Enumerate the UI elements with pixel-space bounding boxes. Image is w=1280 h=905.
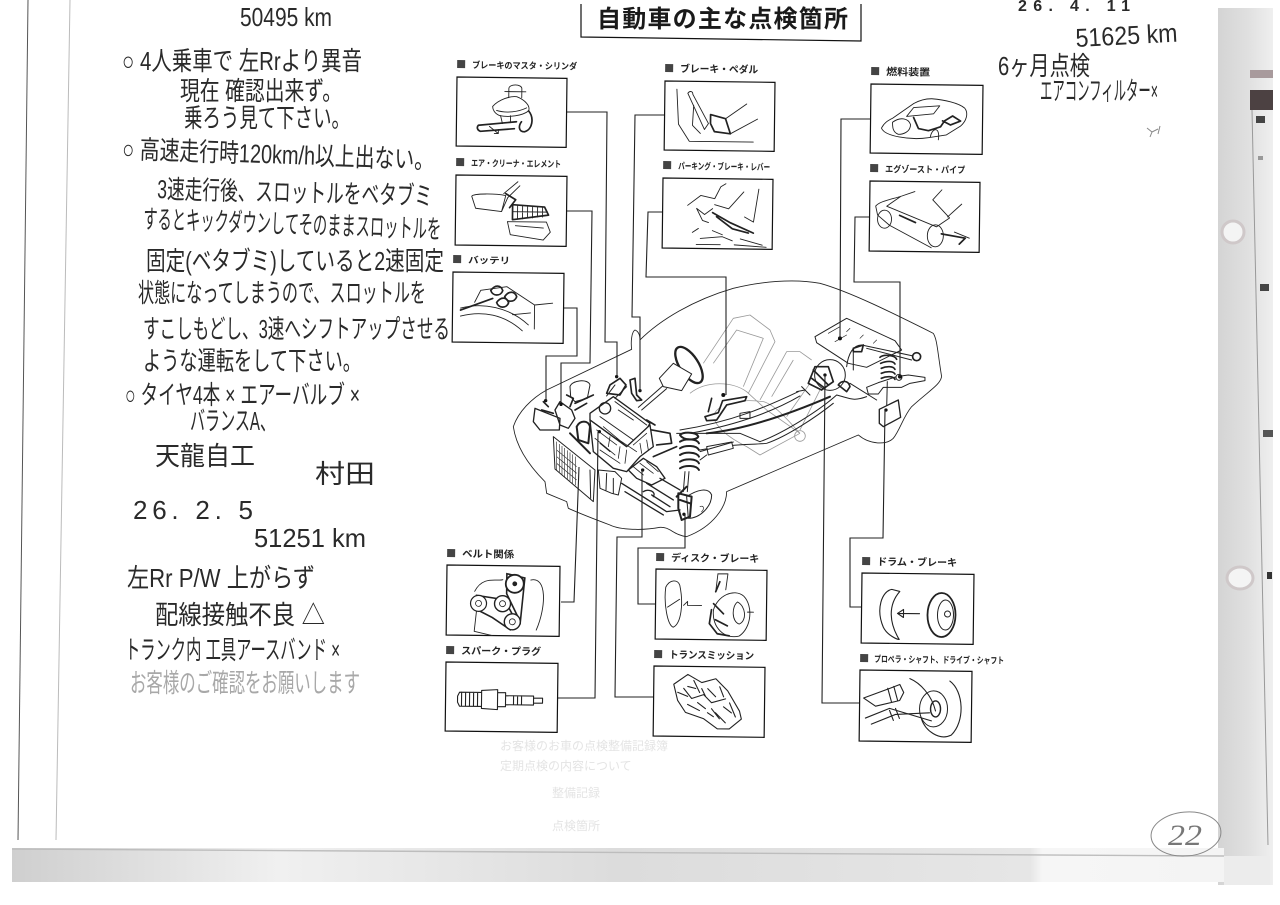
panel: disc brake — [655, 551, 767, 640]
handwritten note: highway speed: ○ 高速走行時120km/h以上出ない。 — [122, 134, 435, 175]
transmission — [628, 458, 665, 485]
handwritten note: rear noise: ○ 4人乗車で 左Rrより異音 — [122, 46, 362, 76]
label: ディスク・ブレーキ — [671, 551, 759, 565]
front suspension spring — [680, 433, 733, 492]
frame — [446, 565, 560, 636]
scan edge: bottom shadow band — [12, 848, 1270, 885]
label: プロペラ・シャフト、ドライブ・シャフト — [874, 653, 1004, 666]
icon: spark plug — [457, 689, 543, 710]
icon: transmission — [673, 674, 742, 729]
handwritten note: power window: 配線接触不良 △ — [155, 600, 325, 630]
label: エグゾースト・パイプ — [885, 163, 965, 175]
frame — [870, 84, 983, 154]
frame — [456, 77, 567, 147]
handwritten note: date and mileage: 51251 km — [254, 523, 366, 553]
connector: air cleaner — [561, 211, 592, 403]
handwritten note: top right: 51625 km — [1075, 18, 1178, 53]
scan edge: left margin — [18, 0, 70, 840]
stray scan marks — [1147, 126, 1160, 137]
panel: propeller shaft — [859, 653, 1004, 743]
scan edge: right binding strip — [1218, 8, 1273, 885]
connector: spark plug — [558, 432, 598, 698]
icon: parking brake lever — [687, 183, 767, 247]
frame — [452, 272, 564, 343]
fuel tank — [815, 318, 921, 370]
handwritten note: highway speed: ような運転をして下さい。 — [143, 346, 361, 376]
icon: brake pedal — [676, 89, 758, 142]
icon: battery — [460, 286, 553, 331]
handwritten note: tires — [125, 380, 360, 436]
title: 自動車の主な点検箇所 — [597, 6, 848, 33]
handwritten note: shop and staff — [155, 441, 375, 489]
handwritten note: date and mileage — [133, 495, 366, 553]
connector: transmission — [615, 470, 654, 697]
label — [860, 653, 1004, 666]
front arm — [622, 478, 680, 515]
handwritten note: rear noise — [122, 46, 362, 133]
connector: brake pedal — [632, 115, 665, 391]
panel: spark plug — [445, 644, 558, 732]
icon: disc brake — [665, 573, 754, 637]
handwritten note: highway speed: 状態になってしまうので、スロットルを — [138, 278, 426, 308]
label: パーキング・ブレーキ・レバー — [678, 160, 770, 172]
label: ベルト関係 — [462, 547, 514, 561]
handwritten note: top right — [998, 0, 1178, 106]
show-through text — [500, 738, 668, 833]
handwritten note: mileage top: 50495 km — [240, 2, 332, 32]
icon: air cleaner element — [471, 181, 551, 240]
handwritten note: shop and staff: 天龍自工 — [155, 441, 255, 471]
handwritten note: tires: バランスA、 — [190, 406, 275, 436]
connector: exhaust — [854, 217, 900, 377]
rear differential and shafts — [677, 360, 877, 450]
icon: propeller and drive shaft — [863, 678, 961, 737]
handwritten note: rear noise: 現在 確認出来ず。 — [180, 76, 342, 106]
panel: transmission — [653, 649, 765, 737]
show-through text: 点検箇所 — [552, 819, 600, 833]
steering wheel and column — [638, 343, 708, 410]
handwritten note: highway speed: するとキックダウンしてそのままスロットルを — [143, 204, 442, 244]
frame — [455, 175, 567, 246]
icon: car exhaust — [875, 189, 970, 248]
handwritten note: tires: ○ タイヤ4本 × エアーバルブ × — [125, 380, 360, 410]
label: ドラム・ブレーキ — [877, 555, 957, 569]
label: バッテリ — [468, 255, 510, 266]
frame — [662, 178, 773, 249]
panel: master cylinder — [456, 59, 577, 147]
panel: air cleaner — [455, 158, 567, 246]
panel: exhaust pipe — [869, 163, 980, 252]
frame — [664, 81, 775, 151]
pointer dots — [544, 336, 902, 516]
handwritten note: highway speed — [122, 134, 450, 376]
label: ブレーキ・ペダル — [680, 62, 758, 76]
rear muffler — [867, 375, 925, 394]
panel: brake pedal — [664, 62, 775, 151]
handwritten note: highway speed: 3速走行後、スロットルをベタブミ — [157, 174, 433, 211]
panel: battery — [452, 255, 564, 343]
title — [581, 4, 861, 41]
car cutaway diagram — [513, 281, 942, 537]
label: エア・クリーナ・エレメント — [471, 158, 561, 169]
connector: master cylinder — [567, 112, 617, 377]
connector: belt — [561, 467, 579, 602]
show-through text: お客様のお車の点検整備記録簿 — [500, 738, 668, 753]
engine — [570, 378, 677, 472]
connector: disc brake — [638, 514, 685, 604]
frame — [861, 573, 974, 644]
label: ブレーキのマスタ・シリンダ — [472, 59, 577, 71]
page number: 22 — [1168, 819, 1202, 852]
connector: fuel — [840, 119, 871, 338]
show-through text: 定期点検の内容について — [500, 759, 632, 773]
connector: parking brake — [646, 212, 726, 395]
frame — [653, 666, 765, 737]
frame — [655, 569, 767, 640]
panel: belts — [446, 547, 560, 636]
seats — [690, 315, 820, 455]
icon: drum brake — [879, 589, 956, 640]
front hub and disc — [677, 487, 712, 520]
frame — [445, 662, 558, 732]
icon: belt pulleys — [470, 573, 544, 636]
show-through text: 整備記録 — [552, 786, 600, 800]
handwritten note: power window: トランク内 工具アースバンド × — [125, 635, 340, 665]
connector: battery — [546, 308, 577, 401]
handwritten note: shop and staff: 村田 — [315, 459, 375, 489]
frame — [859, 670, 972, 742]
car body outline — [513, 281, 942, 537]
radiator — [553, 437, 622, 502]
connector: drum brake — [850, 410, 885, 607]
panel: fuel system — [870, 65, 983, 154]
rear suspension — [879, 355, 902, 427]
page number — [1149, 809, 1223, 859]
handwritten note: rear noise: 乗ろう見て下さい。 — [184, 103, 350, 133]
label: スパーク・プラグ — [461, 644, 541, 658]
handwritten note: power window: お客様のご確認をお願いします — [130, 668, 360, 698]
panel: parking brake — [662, 160, 773, 249]
handwritten note: top right: 6ヶ月点検 — [998, 51, 1090, 81]
handwritten note: highway speed: 固定(ベタブミ)していると2速固定 — [146, 246, 444, 276]
front exhaust pipe — [707, 442, 733, 455]
handwritten note: power window — [125, 563, 360, 698]
label: 燃料装置 — [886, 65, 930, 79]
frame — [869, 181, 980, 252]
label: トランスミッション — [669, 649, 754, 662]
handbrake lever — [705, 397, 747, 421]
handwritten note: power window: 左Rr P/W 上がらず — [127, 563, 315, 593]
handwritten note: highway speed: すこしもどし、3速へシフトアップさせる — [143, 314, 450, 344]
icon: master cylinder — [477, 85, 532, 134]
front reservoirs — [533, 381, 593, 430]
panel: drum brake — [861, 555, 974, 644]
connector: propeller shaft — [822, 375, 860, 703]
icon: car fuel system — [881, 98, 967, 140]
handwritten note: date and mileage: 26. 2. 5 — [133, 495, 253, 525]
